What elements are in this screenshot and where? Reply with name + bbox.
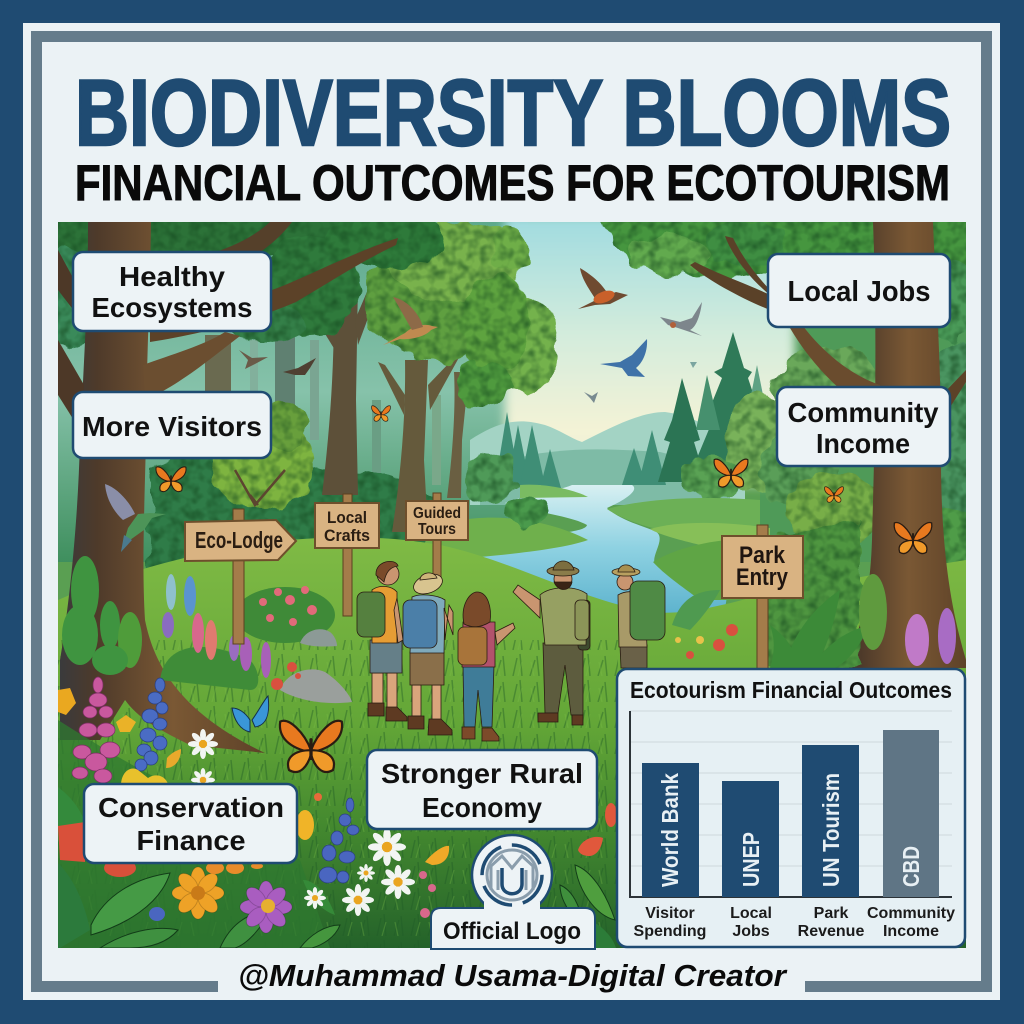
mid-ground tree trunks [322,292,466,532]
bird: small grey [584,392,598,403]
sign: Local Crafts: Local [327,508,367,527]
yellow flowers [296,810,314,840]
category labels: Jobs [732,923,770,940]
callout: Conservation Finance: Finance [136,825,246,856]
tab and circle join [484,902,540,912]
callout: Healthy Ecosystems: Ecosystems [92,292,252,323]
person: hiker with large green backpack [612,565,665,668]
bar: World Bank [642,763,699,897]
sign: Park Entry: Entry [736,564,789,591]
lower left dark foliage [58,720,330,948]
callout: Stronger Rural Economy [367,750,597,829]
butterflies [156,406,932,772]
forest backdrop [58,222,528,562]
left dark canopy [58,222,444,350]
bar: UN Tourism: UN Tourism [818,773,844,887]
orange flower [172,867,224,919]
bird: grey [660,302,702,336]
wildflowers behind sign posts [160,574,335,690]
sign: Guided Tours [406,493,468,577]
bird: orange [578,268,628,309]
upper branch right tree [690,236,767,309]
right side plants [672,520,956,668]
side branch right tree [948,370,966,406]
official logo badge: Official Logo [443,918,581,945]
sign: Local Crafts [315,494,379,616]
logo label tab [431,908,595,949]
delphinium blue [135,678,168,771]
callout: Community Income: Community [788,397,939,428]
scene base fill [58,222,871,604]
right forest canopy masses [681,342,966,563]
bar: CBD [883,730,939,897]
big branch left tree lower [146,332,240,391]
distant pines [495,412,666,488]
bird: small teal [690,362,697,368]
logo mark [482,845,542,905]
callout: Conservation Finance [84,784,297,863]
red flowers by rock [271,662,301,690]
pink buds [419,871,436,918]
red tulips [58,822,85,862]
person: guide in olive outfit [513,561,590,725]
orange flowers behind callout [206,862,263,874]
bird: dark brown [283,358,316,375]
callout: Stronger Rural Economy: Stronger Rural [381,758,583,789]
category labels: Revenue [798,923,864,940]
person: hiker with blue backpack and tan hat [403,570,453,735]
bar: CBD: CBD [898,846,924,887]
purple flower [240,881,292,933]
branch left tree upper [150,238,398,342]
bar chart panel [617,669,965,947]
illustration panel: forest scene [40,205,990,948]
mid forest dark undergrowth [145,459,432,568]
thick branch right tree [790,328,880,386]
bar: UNEP: UNEP [738,832,764,887]
category labels: Income [883,923,939,940]
foxglove pink [72,677,120,783]
callout: More Visitors: More Visitors [82,411,262,442]
sign: Eco-Lodge [185,509,296,644]
sign: Park Entry [722,525,803,670]
lime bush behind eco-lodge sign [210,400,314,510]
callout: Local Jobs [768,254,950,327]
bird: blue [600,339,647,377]
foreground leaves [58,787,616,948]
logo circle [472,835,552,915]
category labels: Local [730,905,772,922]
footer credit: @Muhammad Usama-Digital Creator [238,958,788,993]
meadow grass texture [58,640,618,948]
river [482,485,726,613]
left tree vine [62,556,142,675]
callout: More Visitors [73,392,271,458]
official logo badge [431,835,595,949]
right top canopy [600,210,980,340]
sign: Park Entry: Park [739,542,786,569]
callout: Local Jobs: Local Jobs [788,276,930,308]
category labels: Park [814,905,848,922]
category labels [634,905,955,940]
person: hiker with green backpack and orange shirt [357,561,407,721]
river banks [420,485,775,600]
callout: Community Income [777,387,950,466]
bush branches [235,470,285,505]
right big tree [690,222,966,668]
branch top [219,222,292,251]
blue flower bud [149,907,165,921]
meadow [58,537,966,948]
callout: Healthy Ecosystems: Healthy [119,261,225,292]
category labels: Community [867,905,955,922]
branch left edge [58,340,84,417]
bar: UNEP [722,781,779,897]
tall pines right [658,332,772,482]
category labels: Spending [634,923,706,940]
butterfly: blue [232,696,269,732]
sign: Guided Tours: Guided [413,505,461,522]
chart title: Ecotourism Financial Outcomes [630,677,952,703]
sign: Eco-Lodge: Eco-Lodge [195,527,283,553]
category labels: Visitor [645,905,695,922]
river-side bushes [464,452,549,527]
daisies [368,828,406,866]
bar: World Bank: World Bank [657,773,683,887]
blue spike [319,798,359,883]
callout: Healthy Ecosystems [73,252,271,331]
rocks [280,629,352,703]
callout: Community Income: Income [816,428,910,459]
center canopy [365,222,558,407]
distant hills [470,412,745,505]
sign: Guided Tours: Tours [418,521,456,538]
birds [105,268,702,552]
left big tree [58,222,398,753]
sign: Local Crafts: Crafts [324,526,370,545]
bird: tan [383,297,438,345]
bottom flowers [58,793,617,933]
person: woman with brown backpack [458,592,515,741]
gridlines and axes [630,711,952,897]
sky [505,215,795,485]
bar: UN Tourism [802,745,859,897]
callout: Conservation Finance: Conservation [98,792,284,823]
tall flower spikes [58,677,218,792]
hummingbird [105,484,166,552]
bird: brown [239,350,268,369]
misty background trunks [205,335,441,485]
right forest backdrop [760,328,966,562]
callout: Stronger Rural Economy: Economy [422,792,542,823]
